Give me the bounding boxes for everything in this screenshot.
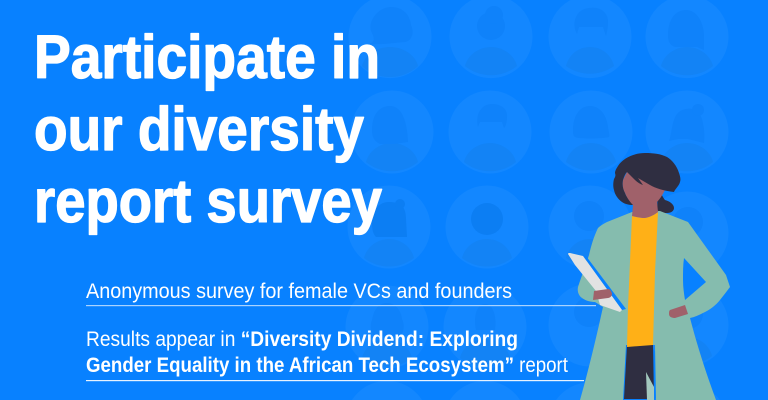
title line 3: report survey	[34, 167, 382, 235]
avatar row 5	[352, 381, 720, 400]
report description: Gender Equality in the African Tech Ecosystem” report	[86, 354, 568, 377]
title	[34, 23, 382, 235]
right hand	[593, 289, 612, 300]
left hand	[669, 305, 688, 318]
report description	[86, 328, 584, 381]
tablet	[568, 253, 622, 312]
hair	[613, 153, 680, 205]
report description: Results appear in “Diversity Dividend: Exploring	[86, 328, 518, 351]
coat gap	[683, 258, 706, 300]
trousers	[624, 344, 654, 399]
trouser shadow coat	[646, 372, 654, 400]
avatar row 4	[346, 284, 728, 368]
hair back	[657, 190, 674, 213]
illustration: woman with tablet	[568, 153, 730, 400]
title line 1: Participate in	[34, 23, 380, 91]
survey description: Anonymous survey for female VCs and founders	[86, 280, 512, 303]
title line 2: our diversity	[34, 95, 364, 163]
avatar row 1	[348, 0, 728, 78]
tablet shadow edge	[583, 256, 626, 310]
divider 1	[86, 305, 596, 306]
neck and face	[623, 172, 665, 218]
avatar row 2	[350, 90, 728, 174]
coat	[578, 211, 730, 400]
divider 2	[86, 380, 584, 381]
avatar pattern	[346, 0, 728, 400]
shirt	[627, 212, 658, 347]
avatar row 3	[348, 186, 728, 274]
